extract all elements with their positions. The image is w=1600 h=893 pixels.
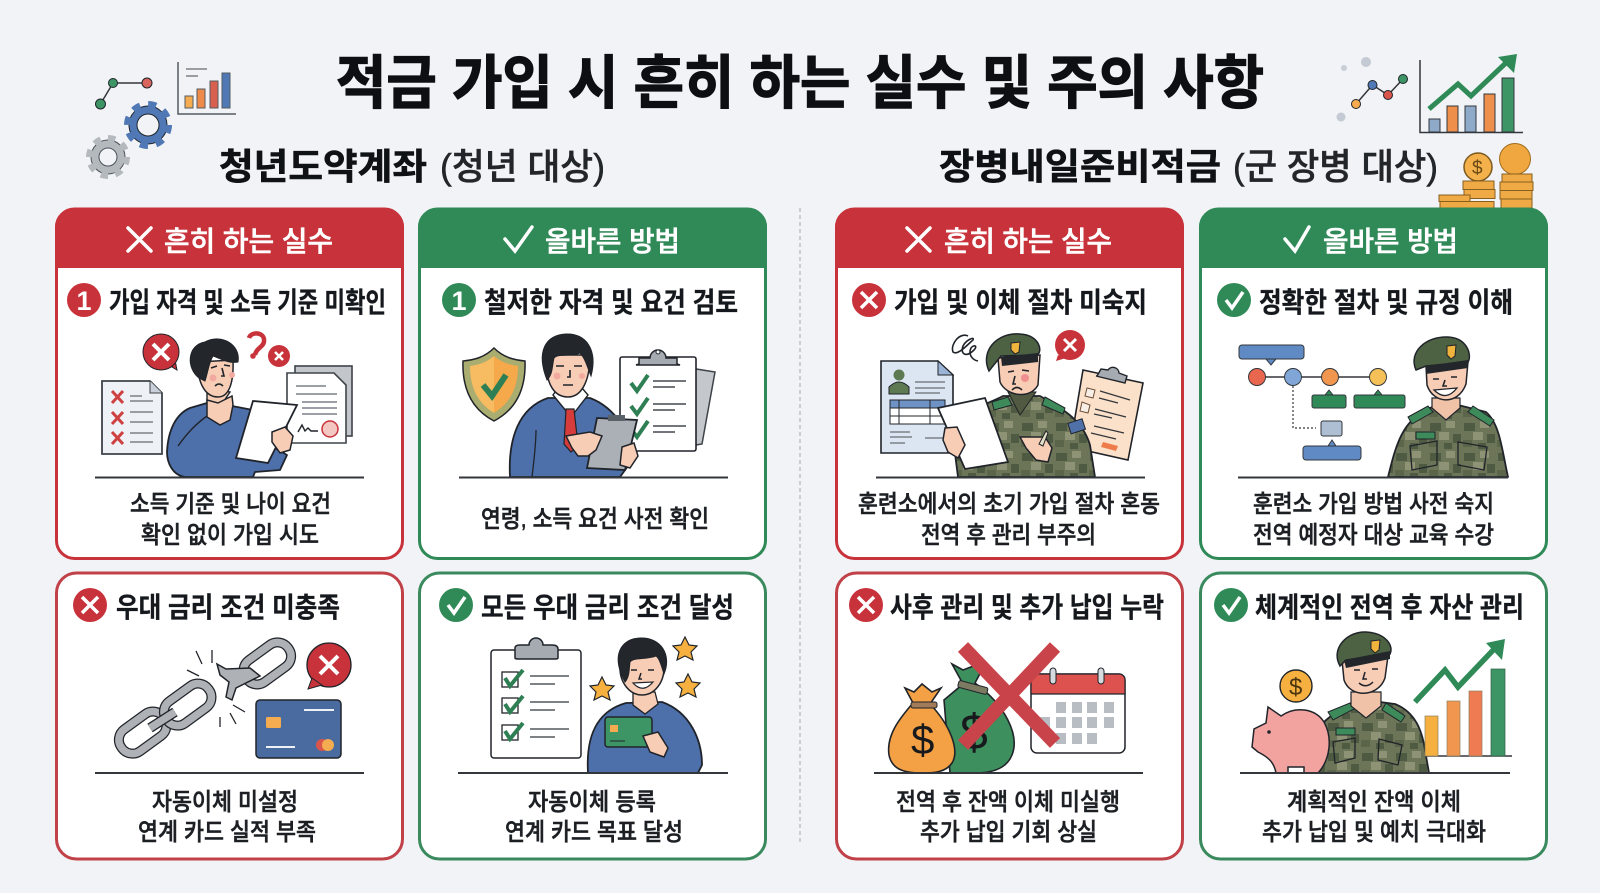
card heading: 우대 금리 조건 미충족: [116, 592, 340, 623]
caption: 추가 납입 기회 상실: [920, 819, 1097, 846]
caption: 훈련소에서의 초기 가입 절차 혼동: [858, 491, 1160, 518]
illustration: money bags, calendar and red cross: $: [960, 704, 988, 760]
divider: [874, 772, 1143, 774]
caption: 연령, 소득 요건 사전 확인: [481, 506, 709, 533]
caption: 추가 납입 및 예치 극대화: [1262, 819, 1486, 846]
badge: number 1: 1: [451, 286, 467, 316]
header: common mistakes: 흔히 하는 실수: [944, 226, 1112, 257]
left section heading: [219, 146, 605, 187]
divider: [1240, 772, 1510, 774]
card heading: 가입 및 이체 절차 미숙지: [894, 287, 1147, 318]
caption: 훈련소 가입 방법 사전 숙지: [1253, 491, 1494, 518]
card heading: 모든 우대 금리 조건 달성: [481, 592, 734, 623]
card heading: 가입 자격 및 소득 기준 미확인: [109, 287, 386, 318]
right section heading: (군 장병 대상): [1233, 146, 1438, 187]
icon: growth chart: [1336, 54, 1523, 132]
caption: [505, 789, 683, 846]
caption: 확인 없이 가입 시도: [141, 522, 319, 549]
panel: youth correct 1: [418, 208, 767, 558]
panel: youth correct 2: [420, 573, 766, 859]
illustration: piggy bank, soldier and growth chart: $: [1289, 674, 1302, 701]
card heading: 정확한 절차 및 규정 이해: [1259, 287, 1513, 318]
caption: [858, 491, 1160, 549]
card heading: 철저한 자격 및 요건 검토: [484, 287, 738, 318]
badge: x: [852, 283, 886, 317]
divider: [876, 476, 1145, 478]
caption: [896, 789, 1120, 846]
header: common mistakes: [835, 208, 1184, 268]
left section heading: (청년 대상): [440, 146, 605, 187]
illustration: confused man with documents: [102, 333, 352, 477]
badge: number 1: 1: [76, 286, 92, 316]
caption: [130, 491, 331, 549]
panel: soldier correct 1: [1199, 208, 1548, 558]
illustration: confused soldier: [881, 330, 1143, 477]
header: common mistakes: 흔히 하는 실수: [164, 226, 333, 257]
caption: 연계 카드 실적 부족: [138, 819, 316, 846]
header: correct method: [418, 208, 767, 268]
panel: youth mistake 1: [55, 208, 404, 558]
right section heading: 장병내일준비적금: [939, 146, 1221, 187]
divider: [458, 772, 728, 774]
panel: soldier correct 2: [1200, 573, 1546, 859]
caption: [1262, 789, 1486, 846]
caption: 계획적인 잔액 이체: [1287, 789, 1461, 816]
illustration: man with shield and checklist: [463, 334, 715, 477]
badge: check: [1217, 283, 1251, 317]
icon: gears and small chart: [89, 62, 236, 176]
header: common mistakes: [55, 208, 404, 268]
card heading: 체계적인 전역 후 자산 관리: [1255, 592, 1524, 623]
header: correct method: 올바른 방법: [1323, 226, 1458, 257]
divider: [95, 476, 364, 478]
divider: [95, 772, 364, 774]
caption: [1253, 491, 1494, 549]
badge: check: [439, 588, 473, 622]
illustration: checklist and happy man with card: [491, 637, 702, 773]
icon: coin stacks: $: [1472, 158, 1483, 179]
badge: x: [73, 588, 107, 622]
badge: number 1: [67, 283, 101, 317]
right section heading: [939, 146, 1438, 187]
panel: soldier mistake 1: [835, 208, 1184, 558]
panel: soldier mistake 2: [836, 573, 1182, 859]
illustration: money bags, calendar and red cross: [889, 647, 1125, 773]
left section heading: 청년도약계좌: [219, 146, 427, 187]
badge: number 1: [442, 283, 476, 317]
caption: 자동이체 미설정: [152, 789, 298, 816]
badge: x: [849, 588, 883, 622]
illustration: flowchart and smiling soldier: [1239, 337, 1508, 477]
caption: [138, 789, 316, 846]
caption: 연계 카드 목표 달성: [505, 819, 683, 846]
caption: 전역 예정자 대상 교육 수강: [1253, 522, 1494, 549]
caption: 소득 기준 및 나이 요건: [130, 491, 331, 518]
divider: [1238, 476, 1508, 478]
illustration: money bags, calendar and red cross: $: [911, 716, 934, 763]
illustration: piggy bank, soldier and growth chart: [1252, 632, 1512, 773]
caption: 전역 후 잔액 이체 미실행: [896, 789, 1120, 816]
badge: check: [1214, 588, 1248, 622]
card heading: 사후 관리 및 추가 납입 누락: [890, 592, 1164, 623]
illustration: broken chain and card: [114, 637, 351, 759]
caption: 자동이체 등록: [528, 789, 656, 816]
header: correct method: [1199, 208, 1548, 268]
title: 적금 가입 시 흔히 하는 실수 및 주의 사항: [336, 51, 1264, 116]
divider: [459, 476, 728, 478]
header: correct method: 올바른 방법: [545, 226, 680, 257]
panel: youth mistake 2: [56, 573, 402, 859]
caption: 전역 후 관리 부주의: [921, 522, 1096, 549]
icon: coin stacks: [1439, 144, 1533, 208]
